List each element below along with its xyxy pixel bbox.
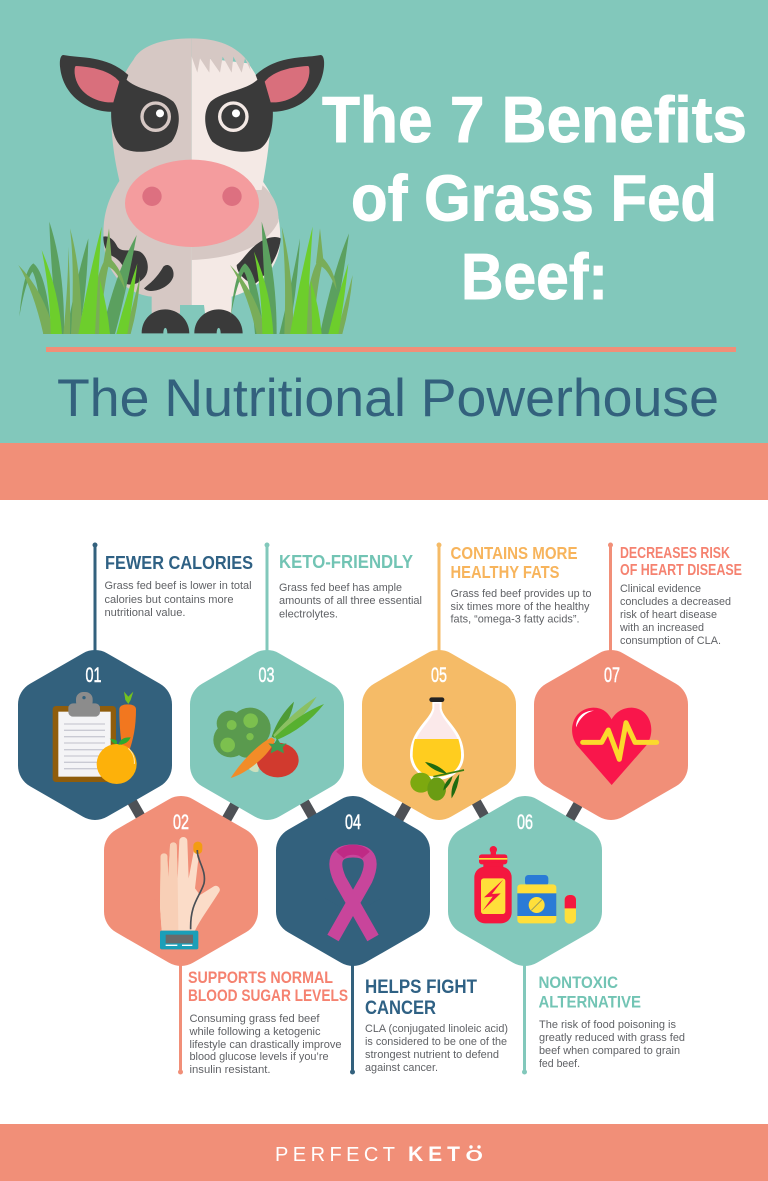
text: contains more healthy fats xyxy=(450,543,592,626)
text: decreases risk of heart disease: Clinical evidence xyxy=(620,583,701,595)
hexagon 01: fewer calories xyxy=(42,664,148,796)
hexagon 07: heart disease: 07 xyxy=(604,664,620,687)
hexagon 06: nontoxic xyxy=(472,811,578,942)
text: decreases risk of heart disease: with an increased xyxy=(619,622,704,634)
text: supports normal blood sugar levels: lifestyle can drastically improve xyxy=(190,1039,342,1051)
title: The 7 Benefits xyxy=(322,83,747,156)
text: supports normal blood sugar levels xyxy=(188,969,348,1076)
text: supports normal blood sugar levels: Consuming grass fed beef xyxy=(190,1013,320,1025)
text: helps fight cancer: is considered to be one of the xyxy=(365,1036,507,1048)
text: nontoxic alternative: NONTOXIC xyxy=(538,973,618,992)
header panel xyxy=(0,0,768,444)
text: contains more healthy fats: six times more of the healthy xyxy=(450,601,590,613)
text: contains more healthy fats: CONTAINS MORE xyxy=(450,543,578,563)
subtitle: The Nutritional Powerhouse xyxy=(57,369,719,428)
text: supports normal blood sugar levels: blood glucose levels if you’re xyxy=(190,1051,328,1063)
text: helps fight cancer: strongest nutrient to defend xyxy=(365,1049,499,1061)
text: supports normal blood sugar levels: insulin resistant. xyxy=(190,1064,270,1076)
text: decreases risk of heart disease: DECREASES RISK xyxy=(620,545,731,562)
title: of Grass Fed xyxy=(351,162,717,234)
text: fewer calories: Grass fed beef is lower in total xyxy=(104,580,252,592)
text: supports normal blood sugar levels: SUPPORTS NORMAL xyxy=(188,969,333,987)
text: decreases risk of heart disease: consumption of CLA. xyxy=(620,635,721,647)
text: keto-friendly: amounts of all three essential xyxy=(279,595,422,607)
connectors between hexagons xyxy=(126,791,584,829)
hexagon 04: cancer: 04 xyxy=(345,811,361,834)
text: nontoxic alternative xyxy=(538,973,685,1070)
text: keto-friendly xyxy=(279,552,422,620)
icon: heart with pulse xyxy=(572,708,657,785)
hexagon 02: blood sugar xyxy=(128,811,234,949)
footer logo: KET xyxy=(408,1143,460,1166)
icon: olive oil bottle xyxy=(410,697,464,801)
title xyxy=(322,83,747,313)
icon: hand with glucose monitor xyxy=(160,837,220,949)
stem lines with end dots xyxy=(92,542,613,1074)
text: decreases risk of heart disease: risk of heart disease xyxy=(620,609,717,621)
text: supports normal blood sugar levels: while following a ketogenic xyxy=(189,1026,321,1038)
hexagon 01: fewer calories: 01 xyxy=(86,664,102,687)
illustration: cow in grass xyxy=(18,38,353,334)
icon: broccoli, carrot and tomato xyxy=(213,697,324,778)
text: helps fight cancer xyxy=(365,976,508,1074)
text: supports normal blood sugar levels: BLOOD SUGAR LEVELS xyxy=(188,987,348,1005)
title divider xyxy=(46,347,736,352)
footer logo: PERFECT xyxy=(275,1144,395,1166)
hexagon 02: blood sugar: 02 xyxy=(173,811,189,834)
footer band xyxy=(0,1124,768,1181)
hexagon 06: nontoxic: 06 xyxy=(517,811,533,834)
hexagon 07: heart disease xyxy=(558,664,664,796)
text: nontoxic alternative: fed beef. xyxy=(539,1058,580,1070)
text: helps fight cancer: CLA (conjugated linoleic acid) xyxy=(365,1023,508,1035)
text: fewer calories: calories but contains more xyxy=(104,594,234,606)
footer logo: O xyxy=(466,1147,483,1165)
text: decreases risk of heart disease: OF HEART DISEASE xyxy=(620,562,742,579)
text: helps fight cancer: against cancer. xyxy=(365,1062,438,1074)
text: fewer calories: nutritional value. xyxy=(104,607,186,619)
text: fewer calories xyxy=(104,553,253,619)
text: decreases risk of heart disease xyxy=(619,545,742,647)
text: nontoxic alternative: ALTERNATIVE xyxy=(538,992,641,1012)
hexagon 05: healthy fats xyxy=(386,664,492,801)
text: nontoxic alternative: greatly reduced with grass fed xyxy=(539,1032,685,1044)
text: nontoxic alternative: beef when compared to grain xyxy=(539,1045,680,1057)
title: Beef: xyxy=(461,240,608,313)
text: nontoxic alternative: The risk of food poisoning is xyxy=(539,1019,676,1031)
text: contains more healthy fats: Grass fed beef provides up to xyxy=(450,588,592,600)
footer logo xyxy=(275,1143,483,1166)
text: contains more healthy fats: fats, “omega-3 fatty acids”. xyxy=(450,614,580,626)
text: decreases risk of heart disease: concludes a decreased xyxy=(620,596,731,608)
text: contains more healthy fats: HEALTHY FATS xyxy=(450,562,560,582)
hexagon 05: healthy fats: 05 xyxy=(431,664,447,687)
hexagon 03: keto-friendly xyxy=(213,664,324,796)
hexagon 04: cancer xyxy=(300,811,406,942)
text: helps fight cancer: HELPS FIGHT xyxy=(365,976,477,998)
text: keto-friendly: KETO-FRIENDLY xyxy=(279,552,413,572)
icon: supplement bottles xyxy=(474,846,576,924)
salmon band xyxy=(0,443,768,500)
text: fewer calories: FEWER CALORIES xyxy=(105,553,253,573)
text: keto-friendly: electrolytes. xyxy=(279,608,338,620)
icon: clipboard with carrot and orange xyxy=(53,692,137,784)
hexagon 03: keto-friendly: 03 xyxy=(258,664,274,687)
text: keto-friendly: Grass fed beef has ample xyxy=(279,582,402,594)
text: helps fight cancer: CANCER xyxy=(365,997,436,1019)
icon: awareness ribbon xyxy=(333,850,373,938)
